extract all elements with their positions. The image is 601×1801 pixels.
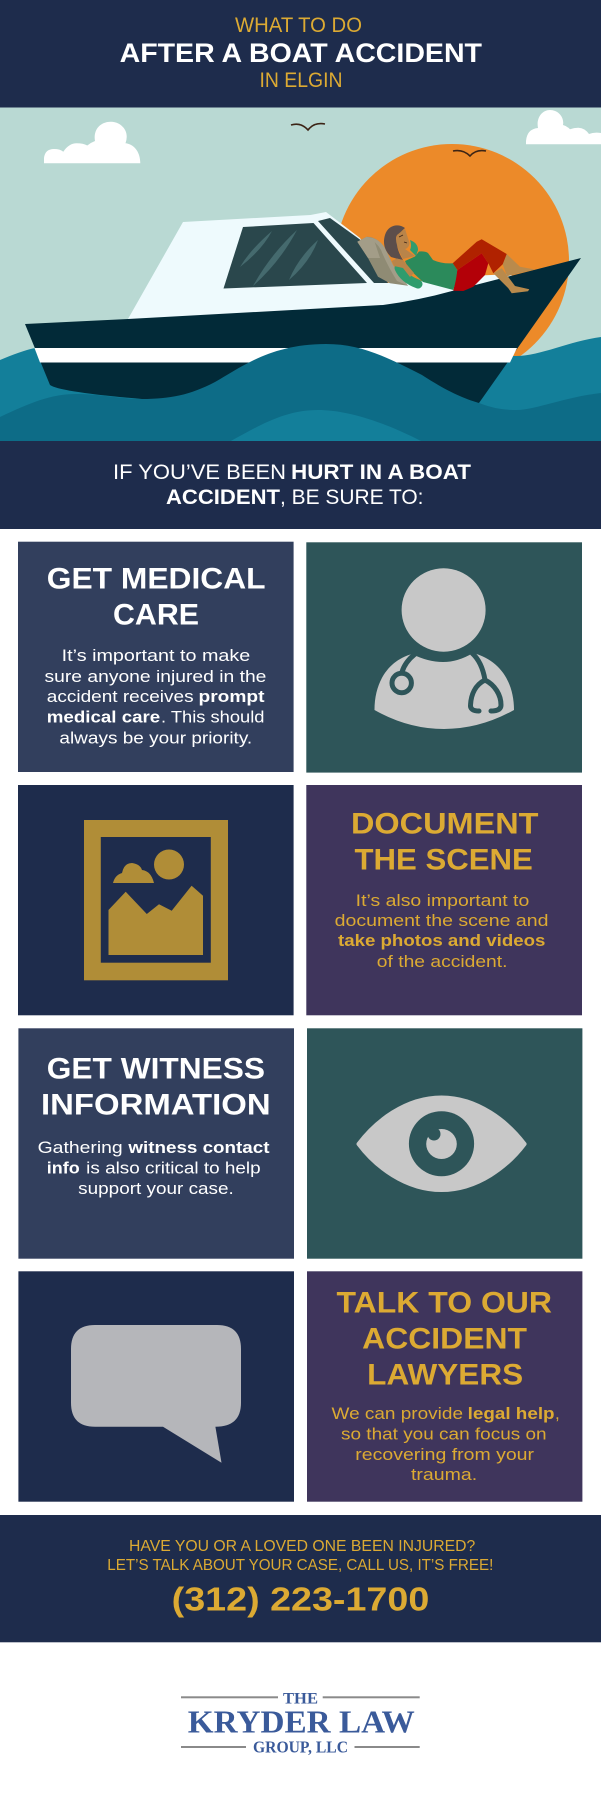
panel: eye icon [307, 1028, 582, 1259]
icon: eye [358, 1098, 525, 1190]
icon: speech bubble [71, 1325, 241, 1463]
call to action banner: LET’S TALK ABOUT YOUR CASE, CALL US, IT’S FREE! [107, 1557, 493, 1574]
panel: get medical care: always be your priority. [59, 728, 252, 747]
panel: document the scene: THE SCENE [354, 843, 533, 876]
panel: get witness information: GET WITNESS [47, 1053, 265, 1086]
panel: speech bubble icon [18, 1271, 294, 1502]
logo: The Kryder Law Group, LLC: THE [283, 1690, 318, 1707]
front wave [230, 410, 422, 442]
panel: talk to our accident lawyers: We can provide [332, 1404, 463, 1423]
panel: doctor icon [306, 542, 582, 773]
title banner: IN ELGIN [260, 69, 342, 92]
panel: get medical care: CARE [113, 599, 199, 632]
panel: get witness information [18, 1028, 294, 1259]
panel: get medical care: GET MEDICAL [47, 563, 266, 596]
panel: get witness information: Gathering [38, 1138, 123, 1157]
logo: The Kryder Law Group, LLC: KRYDER LAW [188, 1704, 415, 1740]
injured woman lying on the boat [357, 225, 535, 293]
logo: The Kryder Law Group, LLC: GROUP, LLC [253, 1738, 348, 1757]
panel: talk to our accident lawyers: ACCIDENT [362, 1323, 527, 1356]
intro banner: , BE SURE TO: [280, 486, 424, 509]
panel: get witness information: witness contact [127, 1138, 270, 1157]
panel: get medical care [18, 542, 294, 772]
sun [335, 144, 569, 378]
panel: talk to our accident lawyers [307, 1271, 582, 1502]
panel: get medical care: prompt [198, 687, 265, 706]
panel: talk to our accident lawyers: recovering from your [355, 1445, 534, 1464]
icon: doctor with stethoscope [374, 568, 514, 729]
intro banner [0, 441, 601, 529]
back wave [0, 337, 601, 441]
icon: bird one [291, 124, 325, 130]
intro banner: ACCIDENT [166, 486, 280, 509]
panel: document the scene: DOCUMENT [351, 807, 538, 840]
icon: cloud right [526, 110, 601, 144]
intro banner: HURT IN A BOAT [291, 461, 471, 484]
middle wave [0, 344, 601, 442]
icon: cloud left [44, 122, 140, 163]
panel: document the scene: take photos and videos [338, 931, 545, 950]
panel: talk to our accident lawyers: legal help [468, 1404, 555, 1423]
illustration: boat at sea with injured woman [0, 108, 601, 442]
panel: document the scene [306, 785, 582, 1015]
panel: get witness information: INFORMATION [41, 1089, 271, 1122]
logo: The Kryder Law Group, LLC [181, 1690, 420, 1757]
panel: get medical care: accident receives [47, 687, 194, 706]
icon: framed picture [84, 820, 228, 980]
boat [25, 212, 581, 420]
panel: get witness information: support your case. [78, 1179, 234, 1198]
panel: talk to our accident lawyers: TALK TO OUR [336, 1287, 552, 1320]
panel: get medical care: medical care [47, 708, 160, 727]
call to action banner [0, 1515, 601, 1642]
panel: get witness information: info [47, 1158, 80, 1177]
panel: get medical care: . This should [161, 708, 264, 727]
call to action banner: (312) 223-1700 [172, 1581, 429, 1618]
panel: document the scene: of the accident. [377, 952, 508, 971]
panel: document the scene: It’s also important to [356, 891, 529, 910]
title banner: AFTER A BOAT ACCIDENT [120, 38, 482, 68]
panel: get medical care: sure anyone injured in the [44, 667, 266, 686]
panel: talk to our accident lawyers: , [555, 1404, 560, 1423]
icon: bird two [453, 151, 486, 156]
panel: talk to our accident lawyers: so that you can focus on [341, 1424, 547, 1443]
title banner: WHAT TO DO [235, 14, 362, 37]
panel: talk to our accident lawyers: LAWYERS [367, 1359, 523, 1392]
panel: get medical care: It’s important to make [62, 646, 250, 665]
panel: photo icon [18, 785, 294, 1015]
call to action banner: HAVE YOU OR A LOVED ONE BEEN INJURED? [129, 1538, 476, 1555]
panel: talk to our accident lawyers: trauma. [411, 1465, 477, 1484]
panel: get witness information: is also critical to help [86, 1158, 261, 1177]
intro banner: IF YOU’VE BEEN [113, 461, 286, 484]
title banner [0, 0, 601, 108]
panel: document the scene: document the scene and [335, 911, 548, 930]
